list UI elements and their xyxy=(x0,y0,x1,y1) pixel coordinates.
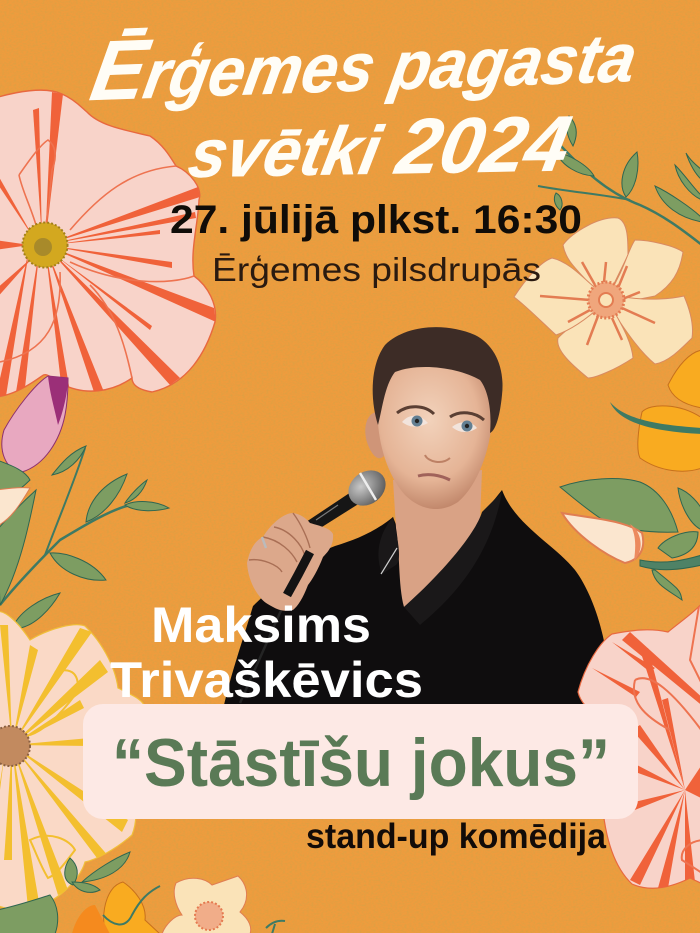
last name: Trivaškēvics xyxy=(110,652,423,708)
branch: top right xyxy=(538,116,700,245)
petal stripes xyxy=(0,92,216,396)
branch: left middle xyxy=(0,446,169,628)
flower: pink top left xyxy=(0,90,216,397)
petal stripes xyxy=(592,632,700,888)
flower: cream top right xyxy=(514,218,693,378)
flowers: bottom edge xyxy=(0,852,285,933)
microphone xyxy=(306,463,393,532)
orange flower bottom xyxy=(104,882,160,933)
nose and mouth xyxy=(418,455,450,480)
flower bud: purple xyxy=(2,376,68,472)
hand xyxy=(247,513,333,611)
flower: pink bottom right xyxy=(578,600,700,888)
venue: Ērģemes pilsdrupās xyxy=(212,251,541,288)
title line 2: svētki 2024 xyxy=(183,100,578,194)
shirt xyxy=(224,490,607,705)
title xyxy=(85,4,645,194)
microphone cable xyxy=(240,597,287,703)
face xyxy=(377,365,493,509)
person: photo of comedian xyxy=(224,327,607,705)
leaves bottom left xyxy=(0,895,58,933)
shirt collar xyxy=(378,492,502,625)
branch: right middle leaves xyxy=(560,479,700,600)
show genre: stand-up komēdija xyxy=(306,817,607,856)
show title panel xyxy=(83,704,638,819)
flower centre xyxy=(22,222,68,268)
hair xyxy=(373,327,503,433)
date and time: 27. jūlijā plkst. 16:30 xyxy=(170,198,582,242)
petal stripes xyxy=(0,625,128,908)
flower centre xyxy=(588,282,624,318)
flower: yellow bottom left xyxy=(0,611,145,910)
flower bud xyxy=(562,513,643,563)
first name: Maksims xyxy=(151,597,371,653)
microphone handle xyxy=(287,552,310,595)
flower centre xyxy=(0,726,30,766)
performer name xyxy=(110,597,423,708)
eyes xyxy=(397,407,484,432)
ear xyxy=(365,412,384,458)
show title: “Stāstīšu jokus” xyxy=(112,725,610,801)
neck xyxy=(393,470,482,607)
flower: orange right xyxy=(610,350,700,471)
cream flower bottom xyxy=(162,876,251,933)
title line 1: Ērģemes pagasta xyxy=(85,4,645,118)
